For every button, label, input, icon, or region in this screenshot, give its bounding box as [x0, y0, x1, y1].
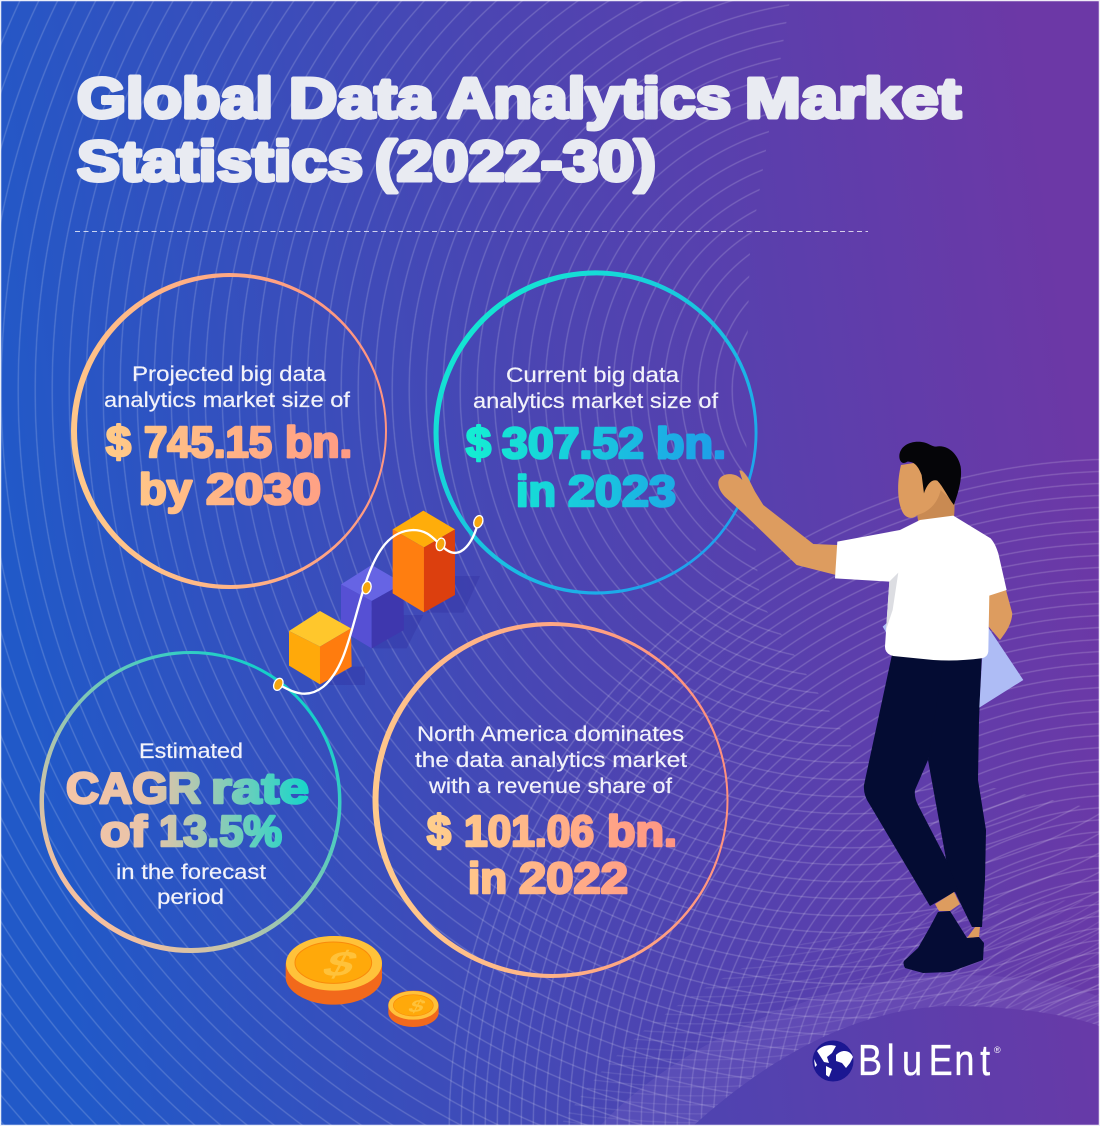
- description: [104, 363, 350, 412]
- value: by: [139, 465, 193, 514]
- wordmark: BluEnt: [858, 1036, 990, 1085]
- value: $: [427, 807, 451, 856]
- hair: [899, 442, 961, 505]
- footer wave: [693, 1006, 1100, 1126]
- upper body: [718, 442, 1023, 708]
- value: 2030: [206, 465, 321, 514]
- dashed divider: [75, 230, 868, 232]
- description: with a revenue share of: [428, 775, 672, 798]
- icon: 3D bars with growth line: [272, 511, 485, 694]
- value: rate: [211, 764, 309, 813]
- value: [66, 764, 309, 856]
- description: Current big data: [506, 364, 679, 387]
- title: Data: [289, 66, 436, 130]
- panel: CAGR: [39, 651, 342, 953]
- person pointing: [718, 442, 1023, 973]
- value: of: [100, 807, 147, 856]
- ring: [434, 270, 758, 595]
- lighter band above footer wave: [600, 975, 1100, 1126]
- title: Statistics: [77, 130, 363, 194]
- icon: gold coins: $: [315, 944, 366, 984]
- value: 2023: [568, 467, 676, 516]
- value: in: [516, 467, 556, 516]
- ring: [39, 651, 342, 953]
- title: Global: [77, 66, 273, 130]
- icon: gold coins: $: [405, 996, 430, 1016]
- back arm: [989, 590, 1012, 640]
- panel: projected market size: [71, 273, 387, 589]
- logo: BluEnt: [812, 1036, 1001, 1085]
- value: CAGR: [66, 764, 201, 813]
- value: bn.: [285, 418, 352, 467]
- pointing arm: [718, 470, 837, 575]
- panel: current market size: [434, 270, 758, 595]
- title: [77, 66, 961, 194]
- description: [415, 723, 687, 798]
- ankles: [935, 892, 980, 938]
- ring: [372, 622, 728, 978]
- forecast label: period: [157, 886, 224, 909]
- shoe: [904, 911, 984, 973]
- value: 307.52: [502, 419, 644, 468]
- title: Analytics: [447, 66, 731, 130]
- forecast label: [116, 861, 266, 909]
- description: analytics market size of: [104, 389, 350, 412]
- description: the data analytics market: [415, 749, 687, 772]
- shirt: [835, 516, 1007, 661]
- ring: [71, 273, 387, 589]
- value: [427, 807, 677, 903]
- trousers: [864, 650, 986, 927]
- description: analytics market size of: [473, 390, 718, 413]
- icon: gold coins: [286, 936, 439, 1027]
- value: $: [466, 419, 491, 468]
- value: $: [106, 418, 131, 467]
- value: bn.: [607, 807, 677, 856]
- panel: North America: [372, 622, 728, 978]
- value: bn.: [656, 419, 726, 468]
- neck and face: [898, 460, 955, 522]
- paper: [883, 622, 1023, 708]
- forecast label: in the forecast: [116, 861, 266, 884]
- description: Projected big data: [132, 363, 326, 386]
- value: in: [468, 854, 507, 903]
- estimated label: Estimated: [139, 740, 243, 763]
- registered mark: ®: [994, 1045, 1001, 1055]
- value: [466, 419, 726, 516]
- value: 745.15: [144, 418, 272, 467]
- title: (2022-30): [375, 130, 656, 194]
- value: 2022: [519, 854, 628, 903]
- shirt fold: [886, 573, 898, 630]
- value: 13.5%: [159, 807, 282, 856]
- description: North America dominates: [417, 723, 684, 746]
- value: [106, 418, 352, 514]
- description: [473, 364, 718, 413]
- icon: globe: [812, 1040, 854, 1082]
- neck shadow: [917, 490, 955, 522]
- value: 101.06: [464, 807, 594, 856]
- title: Market: [745, 66, 961, 130]
